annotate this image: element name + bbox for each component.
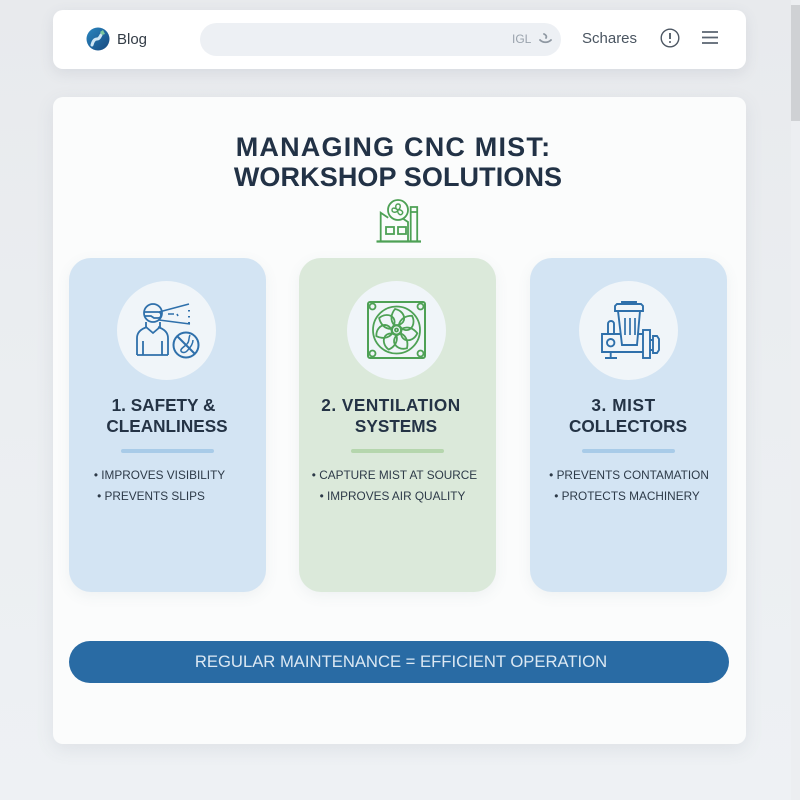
bullet: capture mist at source: • CAPTURE MIST AT SOURCE: [312, 468, 477, 482]
card 2 heading: 2. VENTILATION: [321, 395, 461, 415]
card 1 heading: CLEANLINESS: [106, 416, 228, 436]
card 2 heading: [321, 395, 461, 436]
bullet: improves visibility: • IMPROVES VISIBILITY: [94, 468, 225, 482]
icon: search swirl: [539, 33, 552, 44]
main panel: [53, 97, 746, 744]
top navigation bar: [53, 10, 746, 69]
icon: worker with mist and no-touch sign: [117, 281, 216, 380]
card 3 heading: COLLECTORS: [569, 416, 687, 436]
title: WORKSHOP SOLUTIONS: [234, 162, 562, 192]
card 3: mist collectors: [530, 258, 727, 592]
maintenance banner: REGULAR MAINTENANCE = EFFICIENT OPERATION: [195, 652, 607, 671]
card 1: safety and cleanliness: [69, 258, 266, 592]
shares label: Schares: [582, 30, 637, 47]
card 3 heading: [569, 395, 687, 436]
icon: mist collector machine: [579, 281, 678, 380]
blog label: Blog: [117, 31, 147, 48]
search bar glyphs: IGL: [512, 32, 531, 46]
card 2 rule: [351, 449, 444, 453]
card 3 heading: 3. MIST: [591, 395, 656, 415]
card 1 rule: [121, 449, 214, 453]
scrollbar: [791, 0, 800, 800]
icon: factory with fan: [376, 199, 421, 243]
card 2: ventilation systems: [299, 258, 496, 592]
icon: ventilation fan: [347, 281, 446, 380]
maintenance banner: [69, 641, 729, 683]
card 1 heading: [106, 395, 228, 436]
bullet: protects machinery: • PROTECTS MACHINERY: [554, 489, 700, 503]
card 2 heading: SYSTEMS: [355, 416, 437, 436]
title: [234, 132, 562, 192]
bullet: prevents contamation: • PREVENTS CONTAMATION: [549, 468, 709, 482]
icon: menu: [702, 31, 718, 44]
card 3 rule: [582, 449, 675, 453]
icon: info: [660, 28, 680, 48]
icon: blog logo: [86, 28, 110, 50]
title: MANAGING CNC MIST:: [236, 132, 551, 162]
search bar: [200, 23, 561, 56]
card 1 heading: 1. SAFETY &: [112, 395, 215, 415]
bullet: prevents slips: • PREVENTS SLIPS: [97, 489, 205, 503]
bullet: improves air quality: • IMPROVES AIR QUALITY: [320, 489, 465, 503]
